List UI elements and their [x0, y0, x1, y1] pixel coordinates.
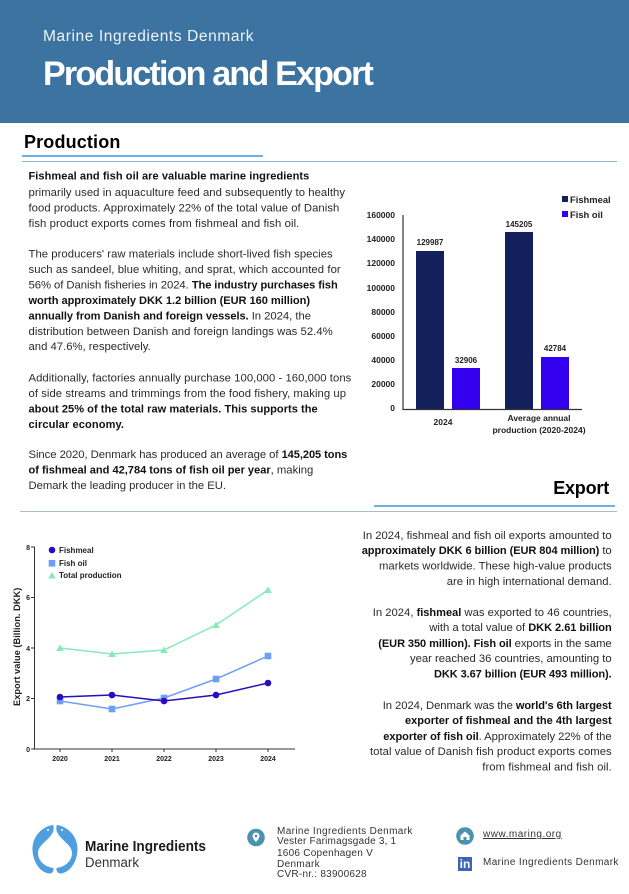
legend: Fishmeal	[570, 194, 611, 205]
bar chart: production	[367, 194, 611, 435]
production text block: of fishmeal and 42,784 tons of fish oil per year, making	[28, 464, 313, 476]
footer logo	[32, 825, 206, 874]
export text block: In 2024, fishmeal was exported to 46 countries,	[373, 607, 612, 619]
export text block: In 2024, Denmark was the world's 6th largest	[383, 700, 612, 712]
logo wordmark: Marine Ingredients	[85, 839, 206, 855]
legend	[562, 194, 611, 220]
address: 1606 Copenhagen V	[277, 848, 373, 859]
y axis labels: 80000	[371, 307, 395, 317]
main title: Production and Export	[43, 55, 372, 93]
y tick labels: 8	[26, 545, 30, 552]
export text block: total value of Danish fish product exports comes	[370, 746, 612, 758]
series: fish oil	[57, 653, 271, 712]
category labels	[434, 413, 586, 435]
production text block: 56% of Danish fisheries in 2024. The industry purchases fish	[28, 280, 338, 292]
value labels: 32906	[455, 356, 478, 365]
x tick labels: 2020	[52, 756, 68, 763]
y axis labels: 40000	[371, 355, 395, 365]
legend: Total production	[59, 571, 122, 580]
header banner	[0, 0, 629, 123]
website link: www.maring.org	[483, 829, 562, 840]
production text block: Demark the leading producer in the EU.	[28, 480, 226, 492]
address: CVR-nr.: 83900628	[277, 869, 367, 880]
export text block: are in high international demand.	[447, 576, 612, 588]
export text block: year reached 36 countries, amounting to	[410, 653, 612, 665]
y tick labels: 0	[26, 747, 30, 754]
axes	[403, 215, 582, 410]
production text block: about 25% of the total raw materials. This supports the	[28, 404, 318, 416]
icon: location pin	[247, 828, 265, 846]
y axis labels: 120000	[367, 258, 395, 268]
production text block: Additionally, factories annually purchase 100,000 - 160,000 tons	[28, 372, 352, 384]
production section divider	[22, 161, 617, 162]
series: fishmeal	[57, 680, 271, 704]
y axis labels: 20000	[371, 379, 395, 389]
category labels: 2024	[434, 417, 453, 427]
icon: home	[456, 827, 474, 845]
category labels: production (2020-2024)	[492, 425, 586, 435]
axes and ticks	[31, 546, 295, 752]
production text block: worth approximately DKK 1.2 billion (EUR 160 million)	[28, 295, 310, 307]
y tick labels: 4	[26, 646, 30, 653]
export text block: markets worldwide. These high-value products	[379, 561, 612, 573]
export heading rule	[374, 505, 615, 507]
legend: Fishmeal	[59, 546, 94, 555]
production text block: such as sandeel, blue whiting, and sprat, which accounted for	[28, 264, 341, 276]
y tick labels: 2	[26, 696, 30, 703]
category labels: Average annual	[508, 413, 570, 423]
production text block: annually from Danish and foreign vessels. In 2024, the	[28, 310, 311, 322]
series: total production	[56, 586, 272, 657]
x tick labels: 2023	[208, 756, 224, 763]
y axis title: Export value (Billion. DKK)	[12, 588, 22, 706]
production text block: food products. Approximately 22% of the total value of Danish	[28, 202, 339, 214]
icon: two fish	[32, 825, 78, 874]
value labels: 145205	[506, 220, 533, 229]
production text block: Since 2020, Denmark has produced an average of 145,205 tons	[28, 449, 347, 461]
y axis labels: 100000	[367, 283, 395, 293]
heading: Production: Production	[24, 132, 120, 152]
production text block: fish product exports comes from fishmeal and fish oil.	[28, 218, 299, 230]
export text block: (EUR 350 million). Fish oil exports in the same	[378, 638, 612, 650]
production heading rule	[22, 155, 263, 157]
export text block: In 2024, fishmeal and fish oil exports amounted to	[363, 530, 612, 542]
production text block: circular economy.	[28, 419, 124, 431]
export text block: DKK 3.67 billion (EUR 493 million).	[434, 669, 612, 681]
export text block: approximately DKK 6 billion (EUR 804 million) to	[362, 545, 612, 557]
export section divider	[20, 511, 617, 512]
legend: Fish oil	[59, 559, 87, 568]
icon: LinkedIn: in	[460, 857, 470, 871]
address: Marine Ingredients Denmark	[277, 826, 413, 837]
organisation name: Marine Ingredients Denmark	[43, 28, 254, 45]
export text block: exporter of fishmeal and the 4th largest	[405, 715, 612, 727]
value labels: 42784	[544, 344, 567, 353]
x tick labels: 2024	[260, 756, 276, 763]
export text block	[362, 530, 612, 774]
legend	[48, 546, 122, 580]
line chart: export value	[12, 545, 295, 763]
y axis labels: 160000	[367, 210, 395, 220]
y axis labels: 60000	[371, 331, 395, 341]
y tick labels	[26, 545, 30, 754]
x tick labels	[52, 756, 276, 763]
production text block: and 47.6%, respectively.	[28, 341, 151, 353]
address: Denmark	[277, 859, 320, 870]
y axis labels: 0	[390, 403, 395, 413]
legend: Fish oil	[570, 209, 603, 220]
LinkedIn name: Marine Ingredients Denmark	[483, 857, 619, 868]
x tick labels: 2021	[104, 756, 120, 763]
production text block: of side streams and trimmings from the food fishery, making up	[28, 388, 346, 400]
address	[277, 826, 413, 880]
bars	[416, 232, 569, 409]
production text block: distribution between Danish and foreign landings was 52.4%	[28, 326, 333, 338]
y axis labels	[367, 210, 395, 413]
heading: Export: Export	[553, 478, 609, 498]
production text block	[28, 170, 352, 492]
export text block: from fishmeal and fish oil.	[482, 762, 612, 774]
export text block: with a total value of DKK 2.61 billion	[428, 622, 612, 634]
y axis labels: 140000	[367, 234, 395, 244]
export text block: exporter of fish oil. Approximately 22% of the	[383, 731, 612, 743]
address: Vester Farimagsgade 3, 1	[277, 836, 396, 847]
logo wordmark	[85, 839, 206, 870]
production text block: The producers' raw materials include short-lived fish species	[28, 248, 333, 260]
value labels	[417, 220, 567, 365]
value labels: 129987	[417, 238, 444, 247]
production text block: Fishmeal and fish oil are valuable marine ingredients	[28, 170, 309, 182]
y tick labels: 6	[26, 595, 30, 602]
x tick labels: 2022	[156, 756, 172, 763]
production text block: primarily used in aquaculture feed and subsequently to healthy	[28, 187, 345, 199]
logo wordmark: Denmark	[85, 855, 139, 870]
